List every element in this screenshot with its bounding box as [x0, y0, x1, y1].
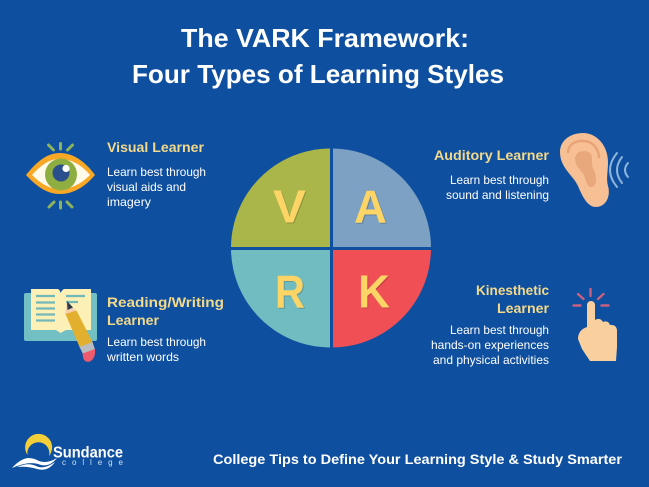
text: reading description — [106, 335, 206, 364]
text: auditory description: Learn best through — [450, 173, 549, 187]
heading: reading/writing learner: Reading/Writing — [107, 294, 224, 310]
heading: kinesthetic learner: Learner — [497, 300, 550, 316]
letter V: V — [273, 180, 306, 232]
heading: visual learner: Visual Learner — [107, 139, 205, 155]
text: auditory description: sound and listening — [446, 188, 549, 202]
pencil — [65, 301, 95, 362]
text: kinesthetic description: hands-on experiences — [431, 338, 549, 352]
text: kinesthetic description: Learn best through — [450, 323, 549, 337]
heading: kinesthetic learner — [476, 282, 550, 316]
icon: ear with sound waves — [560, 133, 628, 207]
letter A: A — [354, 180, 387, 232]
text: visual description — [107, 165, 206, 209]
heading: auditory learner: Auditory Learner — [434, 147, 550, 163]
logo: Sundance College: college — [62, 458, 124, 467]
panel: kinesthetic learner — [431, 282, 550, 367]
icon: open book and pencil — [24, 289, 97, 362]
title — [132, 23, 504, 89]
footer tagline: College Tips to Define Your Learning Style & Study Smarter — [213, 452, 623, 467]
text: visual description: visual aids and — [107, 180, 186, 194]
text: reading description: Learn best through — [107, 335, 206, 349]
heading: reading/writing learner — [107, 294, 224, 328]
text: kinesthetic description: and physical activities — [433, 353, 549, 367]
text: kinesthetic description — [431, 323, 549, 367]
text: reading description: written words — [106, 350, 179, 364]
panel: auditory learner — [434, 147, 550, 202]
logo: Sundance College: Sundance — [53, 444, 123, 462]
heading: reading/writing learner: Learner — [107, 312, 160, 328]
heading: kinesthetic learner: Kinesthetic — [476, 282, 549, 298]
text: visual description: imagery — [107, 195, 151, 209]
text: auditory description — [446, 173, 549, 202]
logo: Sundance College — [12, 434, 124, 470]
text: visual description: Learn best through — [107, 165, 206, 179]
title: The VARK Framework: — [181, 23, 469, 53]
icon: eye — [26, 144, 95, 208]
title: Four Types of Learning Styles — [132, 59, 504, 89]
letter K: K — [358, 266, 390, 318]
panel: visual learner — [107, 139, 206, 209]
panel: reading/writing learner — [106, 294, 224, 364]
VARK circle chart — [231, 148, 431, 348]
letter R: R — [275, 266, 305, 318]
icon: pointing hand — [574, 289, 617, 361]
